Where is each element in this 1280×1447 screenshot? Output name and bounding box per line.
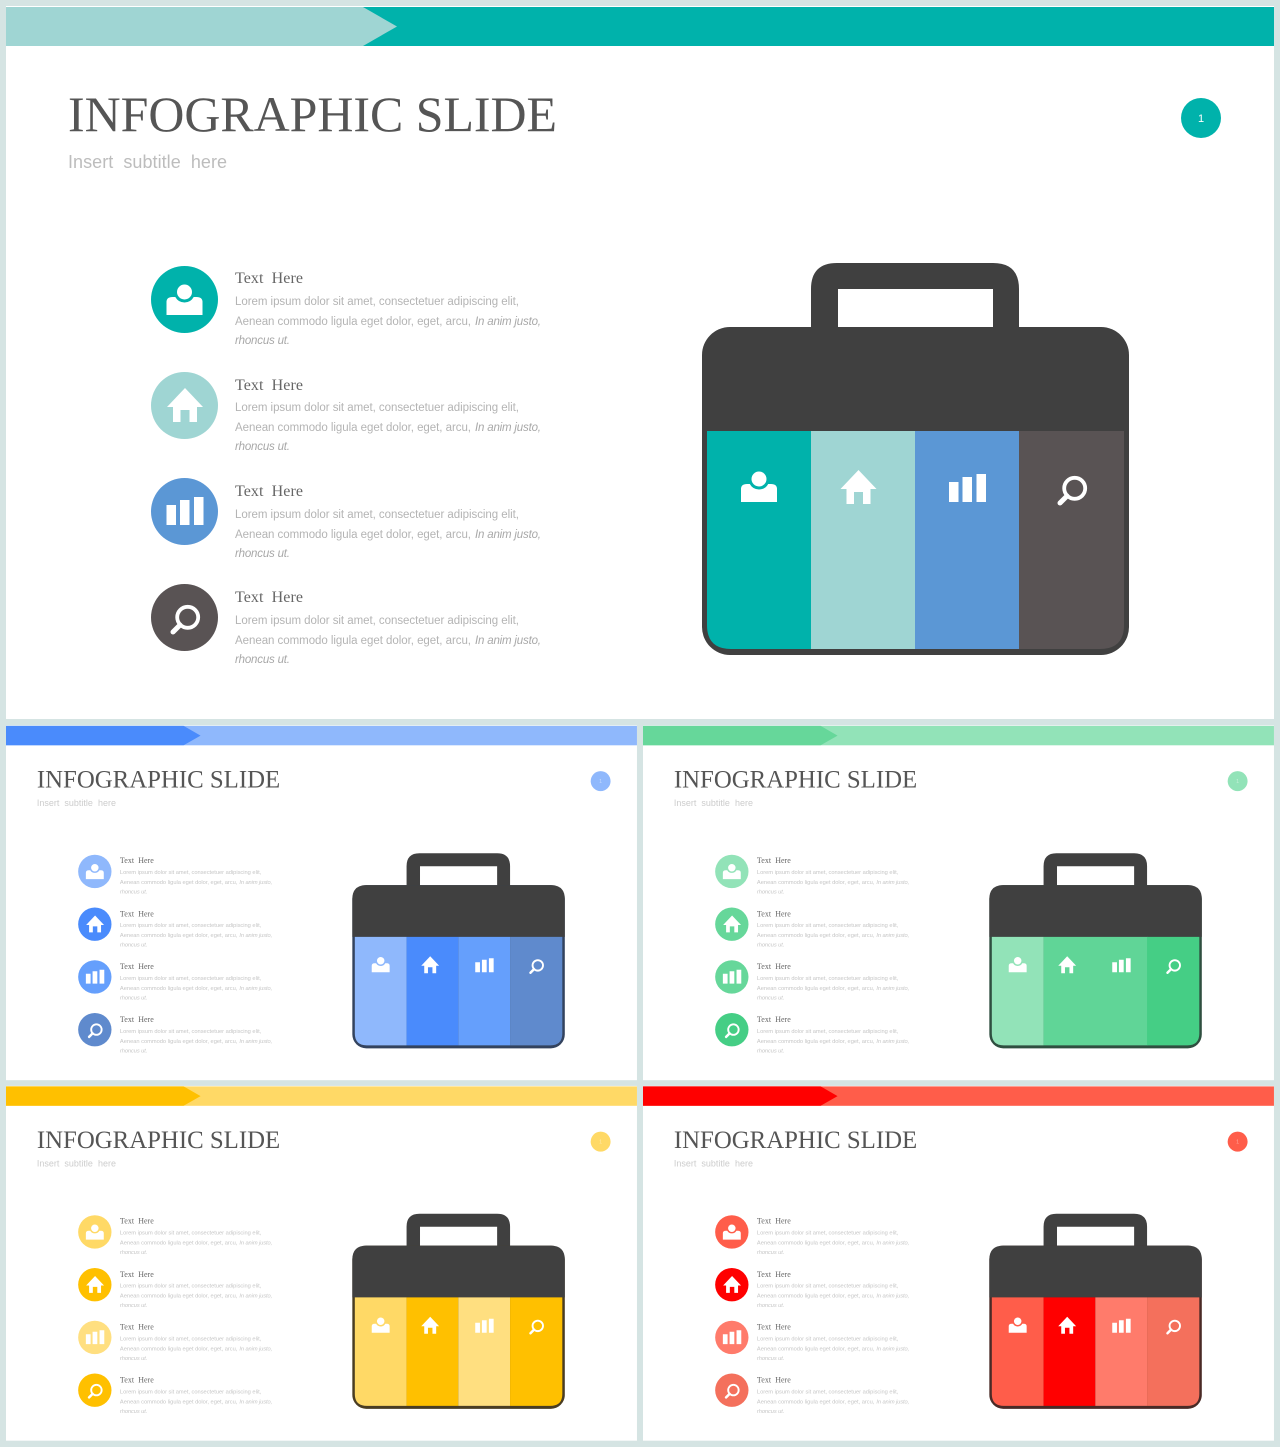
list item 1: Aenean commodo ligula eget dolor, eget, arcu,	[757, 1241, 875, 1247]
list item 3: In anim justo,	[475, 529, 541, 541]
list item 3: rhoncus ut.	[757, 1356, 784, 1362]
list item 4: Aenean commodo ligula eget dolor, eget, arcu,	[757, 1039, 875, 1045]
header band	[643, 726, 1274, 745]
list item 2: Aenean commodo ligula eget dolor, eget, arcu,	[757, 933, 875, 939]
list item 2: rhoncus ut.	[120, 942, 147, 948]
page number badge: 1	[1198, 113, 1204, 125]
list item 4: Aenean commodo ligula eget dolor, eget, arcu,	[757, 1399, 875, 1405]
list item 4: Text Here	[757, 1015, 791, 1024]
list item 3: rhoncus ut.	[120, 996, 147, 1002]
list item 1: rhoncus ut.	[120, 890, 147, 896]
list item 4: Text Here	[120, 1375, 154, 1384]
list item 4: Lorem ipsum dolor sit amet, consectetuer adipiscing elit,	[235, 615, 519, 627]
list item 2: rhoncus ut.	[757, 942, 784, 948]
title: INFOGRAPHIC SLIDE	[37, 1127, 280, 1154]
header band	[6, 726, 637, 745]
list item 1	[78, 855, 272, 896]
list item 2: Text Here	[757, 909, 791, 918]
list item 4	[715, 1013, 909, 1054]
list item 2: Lorem ipsum dolor sit amet, consectetuer adipiscing elit,	[757, 923, 899, 929]
list item 2	[78, 1268, 272, 1309]
list item 4: rhoncus ut.	[120, 1409, 147, 1415]
list item 3: In anim justo,	[876, 1347, 909, 1353]
list item 3: Text Here	[235, 483, 303, 500]
briefcase graphic	[702, 263, 1129, 655]
list item 3: Lorem ipsum dolor sit amet, consectetuer adipiscing elit,	[757, 976, 899, 982]
header band	[6, 1086, 637, 1106]
list item 2: Lorem ipsum dolor sit amet, consectetuer adipiscing elit,	[757, 1283, 899, 1289]
subtitle: Insert subtitle here	[674, 798, 753, 808]
list item 3: Aenean commodo ligula eget dolor, eget, arcu,	[235, 529, 471, 541]
list item 4: rhoncus ut.	[757, 1409, 784, 1415]
list item 4	[78, 1013, 272, 1054]
list item 2	[715, 908, 909, 948]
list item 1: Lorem ipsum dolor sit amet, consectetuer adipiscing elit,	[120, 1231, 262, 1237]
list item 2: Lorem ipsum dolor sit amet, consectetuer adipiscing elit,	[235, 402, 519, 414]
list item 3: Text Here	[757, 1323, 791, 1332]
list item 3: Text Here	[120, 962, 154, 971]
list item 3: Text Here	[120, 1323, 154, 1332]
subtitle: Insert subtitle here	[37, 798, 116, 808]
list item 4: Lorem ipsum dolor sit amet, consectetuer adipiscing elit,	[120, 1389, 262, 1395]
list item 4: Aenean commodo ligula eget dolor, eget, arcu,	[120, 1399, 238, 1405]
list item 2: Aenean commodo ligula eget dolor, eget, arcu,	[235, 422, 471, 434]
list item 2: Text Here	[757, 1270, 791, 1279]
list item 2: In anim justo,	[876, 933, 909, 939]
list item 1: Aenean commodo ligula eget dolor, eget, arcu,	[120, 1241, 238, 1247]
list item 2	[78, 908, 272, 948]
list item 2: Text Here	[235, 377, 303, 394]
list item 1: rhoncus ut.	[757, 890, 784, 896]
list item 1: In anim justo,	[475, 316, 541, 328]
list item 1: Text Here	[235, 270, 303, 287]
page number badge: 1	[599, 779, 602, 785]
list item 4	[715, 1374, 909, 1415]
title: INFOGRAPHIC SLIDE	[68, 86, 557, 142]
list item 3: In anim justo,	[239, 1347, 272, 1353]
page number badge	[1181, 98, 1221, 138]
briefcase graphic	[989, 1214, 1202, 1409]
list item 4: Lorem ipsum dolor sit amet, consectetuer adipiscing elit,	[120, 1029, 262, 1035]
panel: red slide	[643, 1086, 1274, 1441]
list item 4	[151, 584, 541, 666]
briefcase graphic	[352, 1214, 565, 1409]
list item 2: rhoncus ut.	[235, 441, 290, 453]
list item 3	[78, 960, 272, 1002]
page number badge: 1	[599, 1140, 602, 1146]
list item 2	[151, 372, 541, 453]
list item 2: Lorem ipsum dolor sit amet, consectetuer adipiscing elit,	[120, 923, 262, 929]
list item 4: Aenean commodo ligula eget dolor, eget, arcu,	[120, 1039, 238, 1045]
list item 3	[715, 960, 909, 1002]
briefcase graphic	[352, 853, 565, 1048]
list item 1: rhoncus ut.	[235, 335, 290, 347]
list item 3: Aenean commodo ligula eget dolor, eget, arcu,	[757, 986, 875, 992]
list item 2: In anim justo,	[876, 1293, 909, 1299]
subtitle: Insert subtitle here	[37, 1159, 116, 1169]
list item 1	[715, 1215, 909, 1256]
list item 1: Text Here	[120, 1217, 154, 1226]
briefcase graphic	[989, 853, 1202, 1048]
list item 3: rhoncus ut.	[120, 1356, 147, 1362]
list item 2	[715, 1268, 909, 1309]
list item 1: Aenean commodo ligula eget dolor, eget, arcu,	[235, 316, 471, 328]
list item 1: In anim justo,	[876, 1241, 909, 1247]
title: INFOGRAPHIC SLIDE	[674, 767, 917, 794]
list item 4: rhoncus ut.	[120, 1048, 147, 1054]
list item 3: In anim justo,	[239, 986, 272, 992]
list item 1: Text Here	[757, 856, 791, 865]
list item 2: Aenean commodo ligula eget dolor, eget, arcu,	[120, 1293, 238, 1299]
list item 2: In anim justo,	[239, 1293, 272, 1299]
list item 4: rhoncus ut.	[235, 654, 290, 666]
list item 3: Lorem ipsum dolor sit amet, consectetuer adipiscing elit,	[120, 976, 262, 982]
list item 2: In anim justo,	[239, 933, 272, 939]
list item 4: rhoncus ut.	[757, 1048, 784, 1054]
list item 4	[78, 1374, 272, 1415]
list item 3: Lorem ipsum dolor sit amet, consectetuer adipiscing elit,	[120, 1337, 262, 1343]
list item 4: Text Here	[235, 589, 303, 606]
page number badge	[591, 771, 611, 791]
list item 3: rhoncus ut.	[757, 996, 784, 1002]
list item 4: In anim justo,	[239, 1399, 272, 1405]
list item 4: Lorem ipsum dolor sit amet, consectetuer adipiscing elit,	[757, 1389, 899, 1395]
list item 1: In anim justo,	[239, 880, 272, 886]
list item 1: Text Here	[120, 856, 154, 865]
subtitle: Insert subtitle here	[674, 1159, 753, 1169]
list item 1: rhoncus ut.	[120, 1250, 147, 1256]
page number badge	[591, 1132, 611, 1152]
list item 3: Text Here	[757, 962, 791, 971]
list item 1: Lorem ipsum dolor sit amet, consectetuer adipiscing elit,	[757, 1231, 899, 1237]
list item 1: Text Here	[757, 1217, 791, 1226]
list item 1: Lorem ipsum dolor sit amet, consectetuer adipiscing elit,	[235, 296, 519, 308]
list item 2: Aenean commodo ligula eget dolor, eget, arcu,	[120, 933, 238, 939]
list item 3: Aenean commodo ligula eget dolor, eget, arcu,	[757, 1347, 875, 1353]
list item 3: rhoncus ut.	[235, 548, 290, 560]
title: INFOGRAPHIC SLIDE	[674, 1127, 917, 1154]
list item 4: In anim justo,	[475, 635, 541, 647]
list item 4: Lorem ipsum dolor sit amet, consectetuer adipiscing elit,	[757, 1029, 899, 1035]
list item 4: In anim justo,	[876, 1399, 909, 1405]
list item 3	[715, 1321, 909, 1362]
list item 4: In anim justo,	[876, 1039, 909, 1045]
list item 4: Aenean commodo ligula eget dolor, eget, arcu,	[235, 635, 471, 647]
page number badge	[1228, 1132, 1248, 1152]
page number badge: 1	[1236, 1140, 1239, 1146]
page number badge	[1228, 771, 1248, 791]
list item 1	[78, 1215, 272, 1256]
list item 3	[78, 1321, 272, 1362]
panel: blue slide	[6, 725, 637, 1080]
header band	[6, 7, 1274, 46]
list item 3: Aenean commodo ligula eget dolor, eget, arcu,	[120, 1347, 238, 1353]
list item 3: In anim justo,	[876, 986, 909, 992]
list item 1: Aenean commodo ligula eget dolor, eget, arcu,	[120, 880, 238, 886]
list item 2: rhoncus ut.	[120, 1303, 147, 1309]
panel: green slide	[643, 725, 1274, 1080]
list item 4: Text Here	[120, 1015, 154, 1024]
list item 2: Aenean commodo ligula eget dolor, eget, arcu,	[757, 1293, 875, 1299]
list item 1: In anim justo,	[239, 1241, 272, 1247]
list item 1	[151, 266, 541, 347]
list item 2: Text Here	[120, 1270, 154, 1279]
title: INFOGRAPHIC SLIDE	[37, 767, 280, 794]
list item 4: Text Here	[757, 1375, 791, 1384]
list item 3: Lorem ipsum dolor sit amet, consectetuer adipiscing elit,	[757, 1337, 899, 1343]
list item 4: In anim justo,	[239, 1039, 272, 1045]
list item 1	[715, 855, 909, 896]
list item 1: Lorem ipsum dolor sit amet, consectetuer adipiscing elit,	[120, 870, 262, 876]
panel: yellow slide	[6, 1086, 637, 1441]
subtitle: Insert subtitle here	[68, 152, 227, 172]
list item 3: Lorem ipsum dolor sit amet, consectetuer adipiscing elit,	[235, 509, 519, 521]
list item 3	[151, 478, 541, 560]
list item 1: Lorem ipsum dolor sit amet, consectetuer adipiscing elit,	[757, 870, 899, 876]
list item 2: rhoncus ut.	[757, 1303, 784, 1309]
list item 1: rhoncus ut.	[757, 1250, 784, 1256]
list item 1: In anim justo,	[876, 880, 909, 886]
header band	[643, 1086, 1274, 1106]
list item 2: Text Here	[120, 909, 154, 918]
list item 2: In anim justo,	[475, 422, 541, 434]
list item 1: Aenean commodo ligula eget dolor, eget, arcu,	[757, 880, 875, 886]
page number badge: 1	[1236, 779, 1239, 785]
panel: main teal slide	[6, 6, 1274, 719]
list item 2: Lorem ipsum dolor sit amet, consectetuer adipiscing elit,	[120, 1283, 262, 1289]
list item 3: Aenean commodo ligula eget dolor, eget, arcu,	[120, 986, 238, 992]
